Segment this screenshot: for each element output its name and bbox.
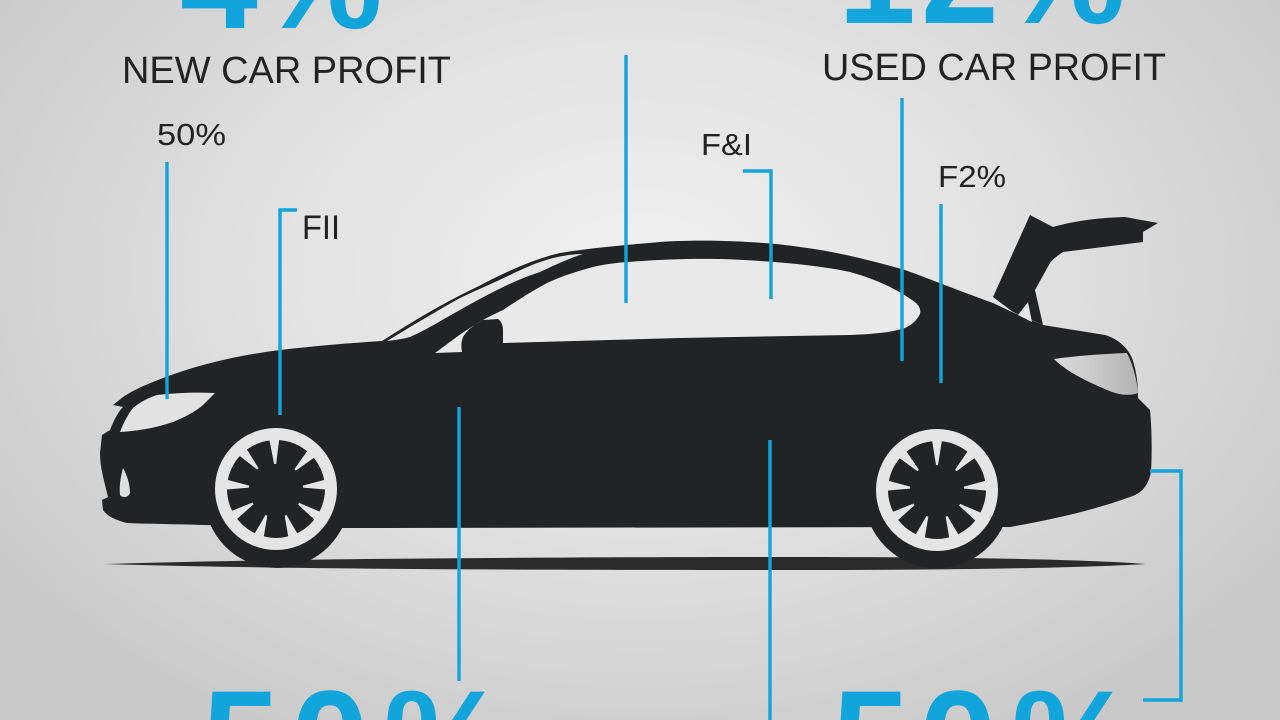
front wheel tyre <box>204 422 350 568</box>
label: 50%: 50% <box>157 117 226 152</box>
rear wheel rim <box>882 435 992 545</box>
front wheel rim <box>221 434 331 544</box>
line: headlight <box>165 162 169 399</box>
callout lines <box>167 55 1181 720</box>
trunk lid <box>993 215 1158 325</box>
heading: new car profit: NEW CAR PROFIT <box>122 50 451 92</box>
headlight <box>120 393 215 432</box>
heading: used car profit: USED CAR PROFIT <box>822 47 1166 89</box>
side window <box>435 259 920 353</box>
label: FII: FII <box>302 209 340 247</box>
label: F&amp;I: F&I <box>701 127 752 162</box>
fog light <box>120 468 130 497</box>
line: lower door right <box>768 440 772 720</box>
line: front wheel bracket <box>280 210 297 415</box>
trunk hinge gap <box>1018 302 1032 322</box>
line: rear pillar <box>900 98 904 361</box>
line: roof <box>624 55 628 303</box>
tail light <box>1054 353 1138 395</box>
line: lower door left <box>457 407 461 681</box>
line: F&I bracket <box>743 171 771 299</box>
line: F2% <box>939 204 943 383</box>
rear wheel tyre <box>864 422 1010 568</box>
label: F2%: F2% <box>938 159 1006 194</box>
line: rear bracket <box>1143 471 1181 700</box>
car body <box>100 241 1152 528</box>
ground shadow <box>105 557 1146 570</box>
windshield sliver <box>387 254 583 341</box>
car silhouette <box>100 215 1158 568</box>
